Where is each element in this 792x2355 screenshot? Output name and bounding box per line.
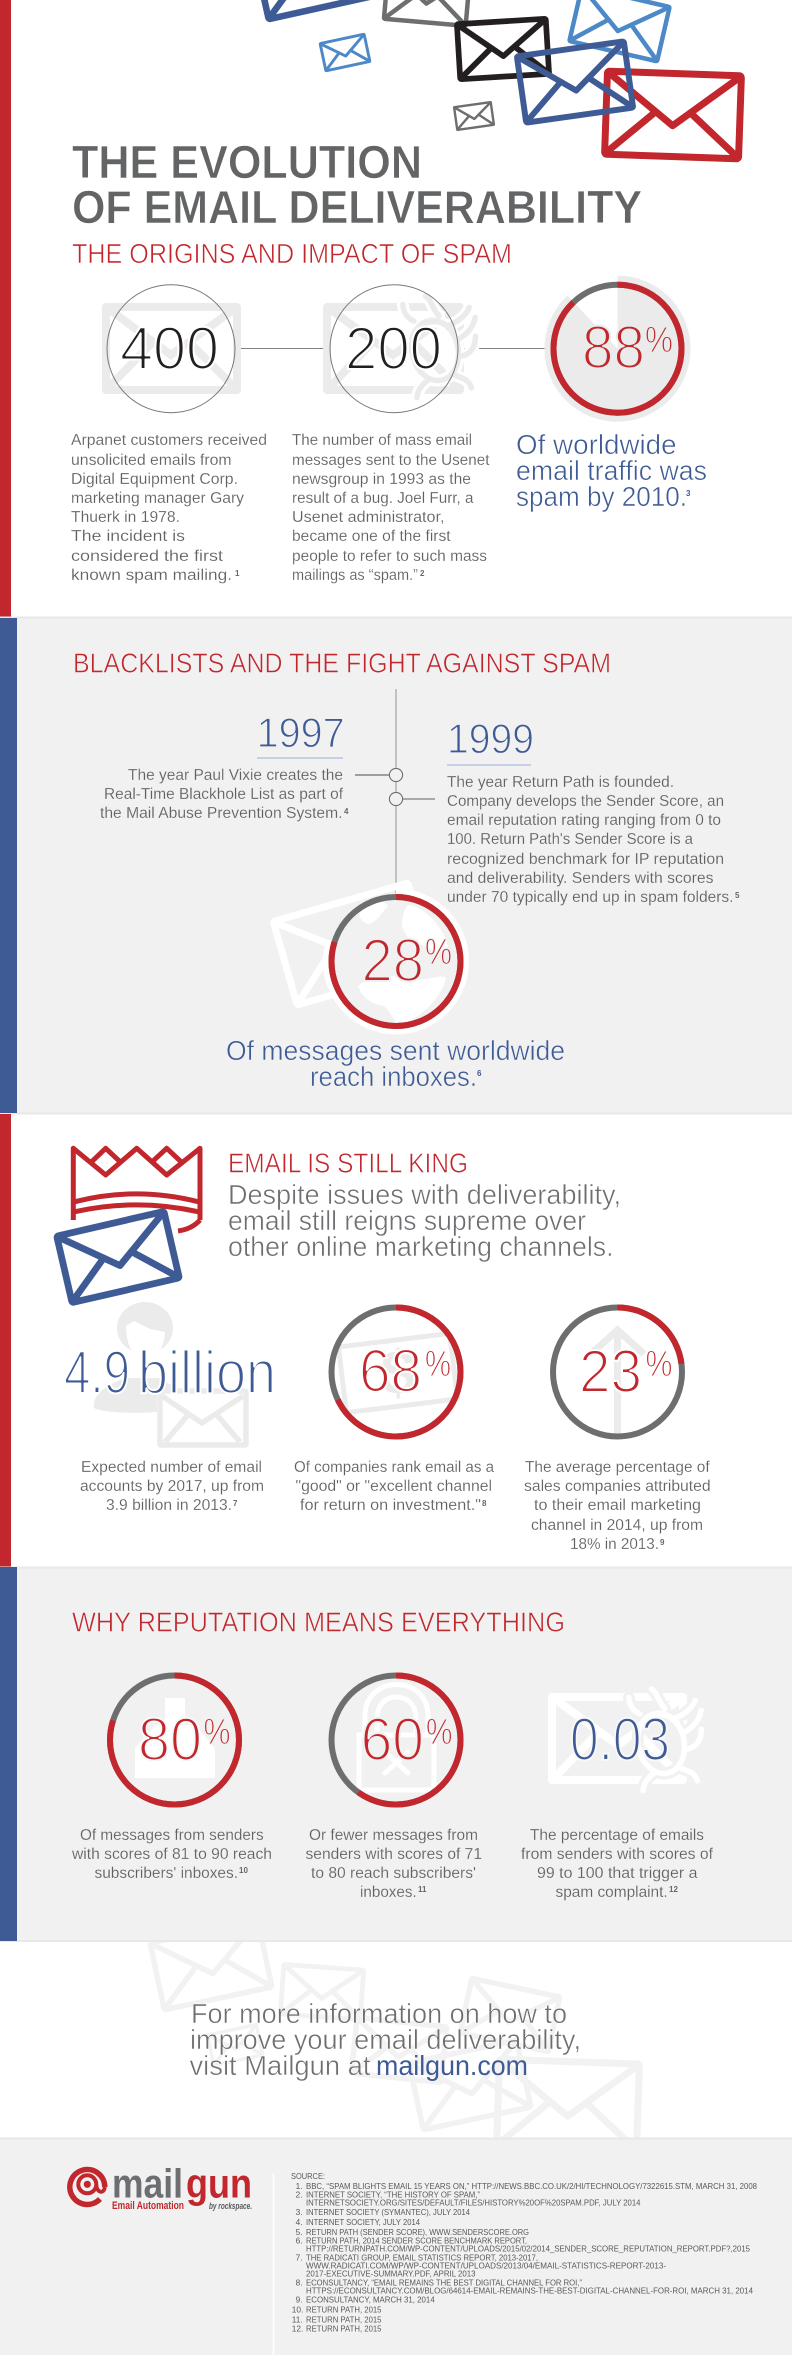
stat: 4.9 billion — [64, 1302, 276, 1445]
text: sources: ECONSULTANCY, “EMAIL REMAINS THE BEST DIGITAL CHANNEL FOR ROI,” — [306, 2278, 582, 2288]
text: sales attributed: 9 — [660, 1538, 665, 1547]
text: email accounts: 3.9 billion in 2013. — [106, 1497, 232, 1514]
text: worldwide traffic: spam by 2010. — [516, 481, 687, 512]
text: sources: INTERNETSOCIETY.ORG/SITES/DEFAULT/FILES/HISTORY%20OF%20SPAM.PDF, JULY 2014 — [306, 2198, 641, 2208]
icon: envelope cluster — [254, 0, 741, 159]
text: companies rank: Of companies rank email as a — [294, 1459, 494, 1476]
text: sources: 2017-EXECUTIVE-SUMMARY.PDF, APRIL 2013 — [306, 2269, 476, 2279]
stat: 0.03: 0.03 — [570, 1706, 670, 1773]
text: sources: INTERNET SOCIETY, “THE HISTORY OF SPAM,” — [306, 2190, 480, 2200]
text: 99 to 100: 99 to 100 that trigger a — [537, 1865, 698, 1882]
stat: 4.9 billion: 4.9 — [64, 1339, 130, 1406]
stat: 23 percent — [553, 1308, 682, 1436]
text: sources: HTTPS://ECONSULTANCY.COM/BLOG/64614-EMAIL-REMAINS-THE-BEST-DIGITAL-CHANNEL-FOR-ROI, MARCH 31, 2014 — [306, 2286, 753, 2296]
logo: mailgun: Email Automation — [112, 2200, 184, 2212]
text: Arpanet: considered the first — [71, 548, 224, 565]
icon: inbox arrow — [135, 1698, 215, 1778]
footer background — [0, 2138, 792, 2355]
text: worldwide traffic: email traffic was — [516, 455, 707, 486]
stat: 0.03 — [552, 1680, 715, 1792]
stat: 68 percent: % — [425, 1343, 451, 1384]
text: 81 to 90: 10 — [239, 1866, 248, 1875]
text: 81 to 90: with scores of 81 to 90 reach — [71, 1846, 272, 1863]
milestone: 1999: email reputation rating ranging from 0 to — [447, 812, 721, 829]
stat: 23 percent: 23 — [579, 1338, 642, 1405]
stat: 28 percent — [273, 883, 463, 1028]
heading: king: EMAIL IS STILL KING — [228, 1148, 468, 1179]
text: messages reach inboxes — [226, 1035, 565, 1092]
text: messages reach inboxes: reach inboxes. — [310, 1061, 477, 1092]
panel: closing call to action — [150, 1920, 639, 2151]
text: more information — [190, 1998, 581, 2081]
left accent bar — [0, 1114, 11, 1567]
text: worldwide traffic: 3 — [686, 489, 691, 498]
milestone: 1999: and deliverability. Senders with scores — [447, 870, 714, 887]
text: mass email: people to refer to such mass — [292, 548, 487, 565]
icon: envelope — [57, 1211, 179, 1303]
text: sources: RETURN PATH, 2015 — [306, 2324, 382, 2334]
text: companies rank — [294, 1459, 494, 1514]
text: sources: RETURN PATH, 2015 — [306, 2305, 382, 2315]
panel: email is still king — [0, 1114, 711, 1567]
stat: 200: 200 — [345, 315, 442, 382]
text: mass email: 2 — [420, 569, 425, 578]
text: sales attributed: 18% in 2013. — [570, 1536, 659, 1553]
text: sales attributed: channel in 2014, up from — [531, 1517, 703, 1534]
icon: envelope and bug — [552, 1680, 715, 1792]
logo: mailgun: mail — [112, 2160, 183, 2206]
text: more information: For more information on how to — [191, 1998, 567, 2029]
text: Arpanet: known spam mailing. — [71, 567, 232, 584]
title — [72, 136, 642, 233]
stat: 68 percent: 68 — [359, 1338, 422, 1405]
text: sources: BBC, “SPAM BLIGHTS EMAIL 15 YEARS ON,” HTTP://NEWS.BBC.CO.UK/2/HI/TECHNOLOGY/7322615.STM, MARCH 31, 2008 — [306, 2181, 757, 2191]
text: messages reach inboxes: 6 — [477, 1069, 482, 1078]
stat: 88 percent — [544, 276, 690, 422]
milestone: 1999: recognized benchmark for IP reputation — [447, 851, 724, 868]
text: messages reach inboxes: Of messages sent worldwide — [226, 1035, 565, 1066]
milestone: 1999: 5 — [735, 891, 740, 900]
heading: reputation: WHY REPUTATION MEANS EVERYTHING — [72, 1607, 565, 1638]
text: sources: 5. — [296, 2227, 303, 2237]
stat: 60 percent: 60 — [361, 1706, 424, 1773]
icon: crown — [73, 1148, 200, 1231]
text: 81 to 90: subscribers' inboxes. — [94, 1865, 238, 1882]
text: sources: 11. — [292, 2315, 303, 2325]
icon: globe — [358, 901, 448, 1024]
stat: 80 percent: 80 — [138, 1706, 202, 1773]
text: mass email: The number of mass email — [292, 432, 472, 449]
left accent bar — [0, 0, 11, 618]
text: Arpanet: marketing manager Gary — [71, 490, 244, 507]
milestone: 1997: the Mail Abuse Prevention System. — [100, 805, 342, 822]
text: email accounts: accounts by 2017, up from — [80, 1478, 264, 1495]
milestone: 1999: 100. Return Path's Sender Score is a — [447, 831, 693, 848]
text: 71 to 80: inboxes. — [360, 1884, 417, 1901]
text: companies rank: 8 — [482, 1499, 487, 1508]
left accent bar — [0, 618, 17, 1113]
text: sources: ECONSULTANCY, MARCH 31, 2014 — [306, 2295, 435, 2305]
text: more information: improve your email deliverability, — [190, 2024, 581, 2055]
icon: padlock — [359, 1684, 434, 1790]
text: email accounts — [80, 1459, 264, 1514]
logo: mailgun: by rockspace. — [209, 2201, 252, 2211]
stat: 80 percent: % — [204, 1711, 230, 1752]
timeline — [355, 689, 435, 894]
text: sources: SOURCE: — [291, 2171, 325, 2181]
section background — [0, 1567, 792, 1941]
text: intro — [228, 1179, 621, 1262]
stat: 200 — [327, 285, 489, 413]
text: more information: visit Mailgun at — [190, 2050, 371, 2081]
connector lines — [235, 348, 551, 350]
text: 71 to 80 — [306, 1827, 482, 1901]
title: THE EVOLUTION — [72, 136, 422, 188]
text: intro: email still reigns supreme over — [228, 1205, 586, 1236]
text: mass email: mailings as “spam.” — [292, 567, 418, 584]
text: sources: 2. — [296, 2190, 303, 2200]
text: companies rank: for return on investment." — [300, 1497, 481, 1514]
title: OF EMAIL DELIVERABILITY — [72, 181, 642, 233]
icon: person — [94, 1302, 176, 1413]
text: 71 to 80: to 80 reach subscribers' — [311, 1865, 476, 1882]
text: worldwide traffic — [516, 429, 707, 512]
text: mass email: newsgroup in 1993 as the — [292, 471, 471, 488]
text: email accounts: 7 — [233, 1499, 238, 1508]
stat: 28 percent: % — [425, 931, 452, 972]
stat: 23 percent: % — [646, 1343, 672, 1384]
stat: 68 percent — [332, 1308, 460, 1436]
milestone: 1997: 1997 — [257, 709, 345, 756]
text: sales attributed: The average percentage of — [525, 1459, 710, 1476]
text: Arpanet: Thuerk in 1978. — [71, 509, 180, 526]
text: 99 to 100: from senders with scores of — [521, 1846, 714, 1863]
milestone: 1997: Real-Time Blackhole List as part of — [104, 786, 344, 803]
text: Arpanet: unsolicited emails from — [71, 452, 232, 469]
milestone: 1999: The year Return Path is founded. — [447, 774, 674, 791]
milestone: 1997: 4 — [344, 807, 349, 816]
text: sources: WWW.RADICATI.COM/WP/WP-CONTENT/UPLOADS/2013/04/EMAIL-STATISTICS-REPORT-2013- — [306, 2260, 666, 2270]
stat: 60 percent — [332, 1676, 460, 1804]
text: sources: 1. — [296, 2181, 303, 2191]
milestone: 1997 — [100, 709, 349, 822]
text: more information: mailgun.com — [376, 2050, 528, 2081]
text: 99 to 100: The percentage of emails — [530, 1827, 704, 1844]
text: sources: INTERNET SOCIETY, JULY 2014 — [306, 2217, 420, 2227]
text: sources: THE RADICATI GROUP, EMAIL STATISTICS REPORT, 2013-2017, — [306, 2253, 538, 2263]
text: companies rank: "good" or "excellent channel — [296, 1478, 492, 1495]
text: Arpanet: Arpanet customers received — [71, 432, 267, 449]
text: mass email: result of a bug. Joel Furr, a — [292, 490, 474, 507]
panel: blacklists — [0, 617, 792, 1114]
stat: 4.9 billion: billion — [138, 1339, 276, 1406]
icon: banknote: $ — [381, 1339, 415, 1408]
milestone: 1999 — [447, 715, 740, 906]
icon: arrow up — [591, 1330, 644, 1435]
text: 81 to 90 — [71, 1827, 272, 1882]
text: mass email: became one of the first — [292, 528, 451, 545]
stat: 88 percent: 88 — [582, 314, 645, 381]
text: sources: 6. — [296, 2236, 303, 2246]
text: sources: 4. — [296, 2217, 303, 2227]
text: sources: HTTP://RETURNPATH.COM/WP-CONTENT/UPLOADS/2015/02/2014_SENDER_SCORE_REPUTATION_REPORT.PDF?,2015 — [306, 2244, 750, 2254]
text: sources: 10. — [292, 2305, 303, 2315]
stat: 400 — [106, 285, 237, 413]
milestone: 1999: under 70 typically end up in spam folders. — [447, 889, 734, 906]
text: mass email — [292, 432, 490, 584]
panel: origins of spam — [0, 0, 741, 618]
panel: footer — [0, 2138, 792, 2355]
text: sales attributed: to their email marketing — [534, 1497, 701, 1514]
text: sources: 7. — [296, 2253, 303, 2263]
text: sources: 9. — [296, 2295, 303, 2305]
text: sources — [291, 2171, 757, 2334]
left accent bar — [0, 1567, 17, 1941]
text: 99 to 100: 12 — [669, 1885, 678, 1894]
stat: 60 percent: % — [426, 1711, 452, 1752]
stat: 28 percent: 28 — [362, 927, 424, 994]
text: sources: RETURN PATH (SENDER SCORE), WWW.SENDERSCORE.ORG — [306, 2227, 529, 2237]
text: worldwide traffic: Of worldwide — [516, 429, 677, 460]
text: intro: other online marketing channels. — [228, 1231, 614, 1262]
text: Arpanet: Digital Equipment Corp. — [71, 471, 238, 488]
text: 99 to 100: spam complaint. — [556, 1884, 668, 1901]
stat: 88 percent: % — [645, 319, 673, 360]
text: sources: RETURN PATH, 2014 SENDER SCORE BENCHMARK REPORT, — [306, 2236, 527, 2246]
text: sales attributed: sales companies attributed — [524, 1478, 711, 1495]
text: sources: 12. — [292, 2324, 303, 2334]
text: sources: RETURN PATH, 2015 — [306, 2315, 382, 2325]
text: Arpanet: The incident is — [71, 528, 185, 545]
text: 81 to 90: Of messages from senders — [80, 1827, 264, 1844]
milestone: 1999: Company develops the Sender Score, an — [447, 793, 724, 810]
watermark envelopes — [150, 1920, 639, 2151]
stat: 400: 400 — [120, 315, 219, 382]
milestone: 1997: The year Paul Vixie creates the — [128, 767, 343, 784]
heading: origins: THE ORIGINS AND IMPACT OF SPAM — [72, 238, 512, 269]
logo: mailgun — [70, 2160, 252, 2212]
text: Arpanet: 1 — [235, 569, 240, 578]
text: mass email: messages sent to the Usenet — [292, 452, 490, 469]
milestone: 1999: 1999 — [447, 715, 534, 762]
text: sources: 3. — [296, 2207, 303, 2217]
text: 71 to 80: Or fewer messages from — [309, 1827, 478, 1844]
text: email accounts: Expected number of email — [81, 1459, 262, 1476]
heading: blacklists: BLACKLISTS AND THE FIGHT AGAINST SPAM — [73, 648, 611, 679]
logo: mailgun: gun — [186, 2160, 252, 2206]
text: sales attributed — [524, 1459, 711, 1553]
text: 71 to 80: 11 — [418, 1885, 427, 1894]
text: Arpanet — [71, 432, 267, 584]
text: mass email: Usenet administrator, — [292, 509, 444, 526]
section background — [0, 617, 792, 1114]
text: sources: INTERNET SOCIETY (SYMANTEC), JULY 2014 — [306, 2207, 470, 2217]
text: 71 to 80: senders with scores of 71 — [306, 1846, 482, 1863]
text: sources: 8. — [296, 2278, 303, 2288]
text: intro: Despite issues with deliverability, — [228, 1179, 621, 1210]
stat: 80 percent — [110, 1676, 239, 1804]
text: 99 to 100 — [521, 1827, 714, 1901]
panel: why reputation — [0, 1567, 792, 1941]
